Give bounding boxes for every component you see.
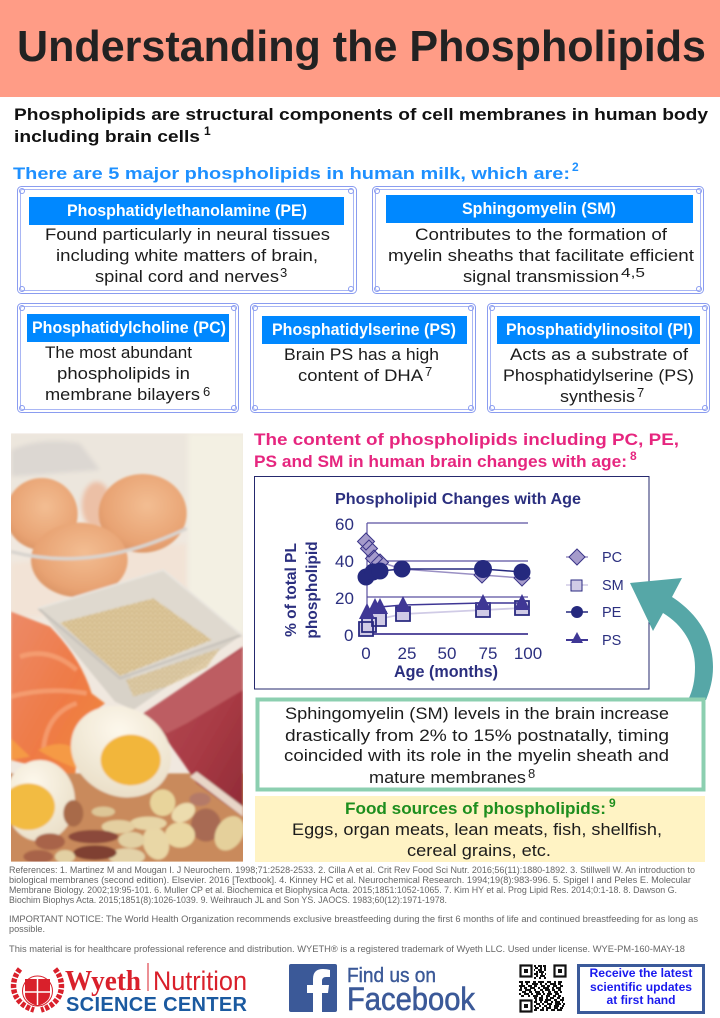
panel: phosphatidylinositol: Phosphatidylinositol (PI) [506,321,693,339]
important notice: IMPORTANT NOTICE: The World Health Organization recommends exclusive breastfeeding during the first 6 months of life and continued breastfeeding for as long as [9,914,699,924]
logo: Find us on Facebook [289,964,476,1017]
callout: sphingomyelin levels: drastically from 2% to 15% postnatally, timing [285,727,669,745]
callout: receive updates: Receive the latest [590,968,693,980]
icon: crest [14,969,61,1010]
panel: phosphatidylserine: Brain PS has a high [284,346,439,364]
QR code [519,966,566,1012]
x axis labels [361,644,542,663]
y axis title: phospholipid [304,541,321,639]
panel: sphingomyelin: 4,5 [621,265,645,280]
series: PE [358,560,530,586]
panel: phosphatidylinositol [488,304,710,412]
legend: SM [602,578,624,594]
logo: Wyeth Nutrition Science Center: Wyeth [65,965,141,997]
panel: phosphatidylethanolamine: 3 [280,265,287,280]
panel: phosphatidylinositol: 7 [637,385,644,400]
y axis labels: 40 [335,552,354,571]
x axis labels: 75 [479,644,497,663]
arrow: curved teal arrow [630,578,713,700]
panel: phosphatidylserine: Phosphatidylserine (PS) [272,321,456,339]
subheading: 5 major phospholipids: There are 5 major phospholipids in human milk, which are: [13,164,570,183]
panel: sphingomyelin: myelin sheaths that facilitate efficient [388,247,694,265]
important notice: possible. [9,924,45,934]
chart heading: PS and SM in human brain changes with age: [254,452,627,471]
important notice [9,914,699,934]
x axis labels: 0 [361,644,371,663]
y axis labels [335,515,354,645]
chart: phospholipid changes with age [254,476,649,689]
photo: eggs, grains, salmon, meat, nuts, milk [0,433,250,865]
disclaimer: This material is for healthcare professional reference and distribution. WYETH® is a registered trademark of Wyeth LLC. Used under license. WYE-PM-160-MAY-18 [9,944,685,954]
logo: Wyeth Nutrition Science Center: SCIENCE CENTER [66,994,248,1016]
legend: PE [602,605,622,621]
callout: sphingomyelin levels: Sphingomyelin (SM) levels in the brain increase [285,705,669,723]
x axis labels: 50 [438,644,456,663]
logo: Wyeth Nutrition Science Center [14,963,248,1016]
panel: phosphatidylinositol: synthesis [560,388,635,406]
panel: phosphatidylethanolamine: Found particularly in neural tissues [45,226,330,244]
panel: food sources [255,796,705,862]
logo: Find us on Facebook: Find us on [347,965,436,987]
logo: Wyeth Nutrition Science Center: Nutrition [153,966,247,996]
panel: phosphatidylethanolamine: including white matters of brain, [56,247,318,265]
legend [566,549,624,649]
intro text: Phospholipids are structural components of cell membranes in human body [14,105,709,124]
y axis labels: 20 [335,589,354,608]
x axis labels: 25 [398,644,416,663]
chart heading: 8 [630,449,637,463]
panel: phosphatidylserine: 7 [425,364,432,379]
panel: sphingomyelin: signal transmission [463,268,619,286]
intro text: including brain cells [14,127,200,146]
legend: PS [602,633,621,649]
chart heading [254,430,679,471]
panel: phosphatidylcholine: 6 [203,384,210,399]
panel: sphingomyelin: Contributes to the formation of [415,226,667,244]
references: Biochim Biophys Acta. 2015;1851(8):1026-1039. 9. Weihrauch JL and Son YS. JAOCS. 1983;60(12):1971-1978. [9,895,447,905]
callout: sphingomyelin levels: 8 [528,766,535,781]
panel: phosphatidylinositol: Phosphatidylserine (PS) [503,367,694,385]
references [9,865,695,905]
callout: sphingomyelin levels: mature membranes [369,769,526,787]
panel: phosphatidylinositol: Acts as a substrate of [510,346,688,364]
chart heading: The content of phospholipids including PC, PE, [254,430,679,449]
icon: facebook [289,964,337,1012]
panel: phosphatidylcholine: membrane bilayers [45,386,200,404]
x axis labels: 100 [514,644,542,663]
series: PS [359,594,530,619]
panel: food sources: Eggs, organ meats, lean meats, fish, shellfish, [292,821,662,839]
panel: phosphatidylethanolamine [18,186,356,294]
y axis labels: 60 [335,515,354,534]
panel: sphingomyelin [372,186,704,294]
callout: sphingomyelin levels: coincided with its role in the myelin sheath and [284,747,669,765]
panel: phosphatidylserine: content of DHA [298,367,423,385]
x axis title: Age (months) [394,663,498,681]
logo: Find us on Facebook: Facebook [347,981,476,1017]
callout: receive updates [578,966,704,1012]
panel: phosphatidylcholine: The most abundant [45,344,192,362]
panel: phosphatidylethanolamine: spinal cord and nerves [95,268,279,286]
panel: food sources: cereal grains, etc. [407,842,551,860]
title: Understanding the Phospholipids [17,22,706,71]
y axis title [283,541,321,639]
panel: phosphatidylcholine: phospholipids in [57,365,190,383]
references: References: 1. Martinez M and Mougan I. J Neurochem. 1998;71:2528-2533. 2. Cilla A et al. Crit Rev Food Sci Nutr. 2016;56(11):1880-1892. 3. Stillwell W. An introduction to [9,865,695,875]
header banner [0,0,720,97]
panel: food sources: 9 [609,796,616,810]
references: biological membranes (second edition). Elsevier. 2016 [Textbook]. 4. Kinney HC et al. Neurochemical Research. 1994;19(8):983-996. 5. Spigel I and Peles E. Molecular [9,875,691,885]
callout: receive updates: scientific updates [590,982,692,994]
chart title: Phospholipid Changes with Age [335,491,581,508]
intro text: 1 [204,124,211,138]
y axis labels: 0 [344,626,353,645]
panel: phosphatidylcholine [18,304,238,412]
panel: phosphatidylethanolamine: Phosphatidylethanolamine (PE) [67,202,307,220]
panel: sphingomyelin: Sphingomyelin (SM) [462,200,616,218]
callout: sphingomyelin levels [258,700,704,790]
y axis title: % of total PL [283,543,300,637]
series: PC [358,533,530,586]
callout: receive updates: at first hand [606,995,676,1007]
series: SM [359,601,529,636]
legend: PC [602,550,622,566]
panel: food sources: Food sources of phospholipids: [345,800,606,818]
panel: phosphatidylserine [250,304,476,412]
subheading: 5 major phospholipids [13,160,579,183]
intro text [14,105,709,146]
subheading: 5 major phospholipids: 2 [572,160,579,174]
references: Membrane Biology. 2002;19:95-101. 6. Muller CP et al. Biochemica et Biophysica Acta. 2015;1851:1052-1065. 7. Kim HY et al. Prog Lipid Res. 2014;0:1-18. 8. Dawson G. [9,885,677,895]
panel: phosphatidylcholine: Phosphatidylcholine (PC) [32,319,226,337]
